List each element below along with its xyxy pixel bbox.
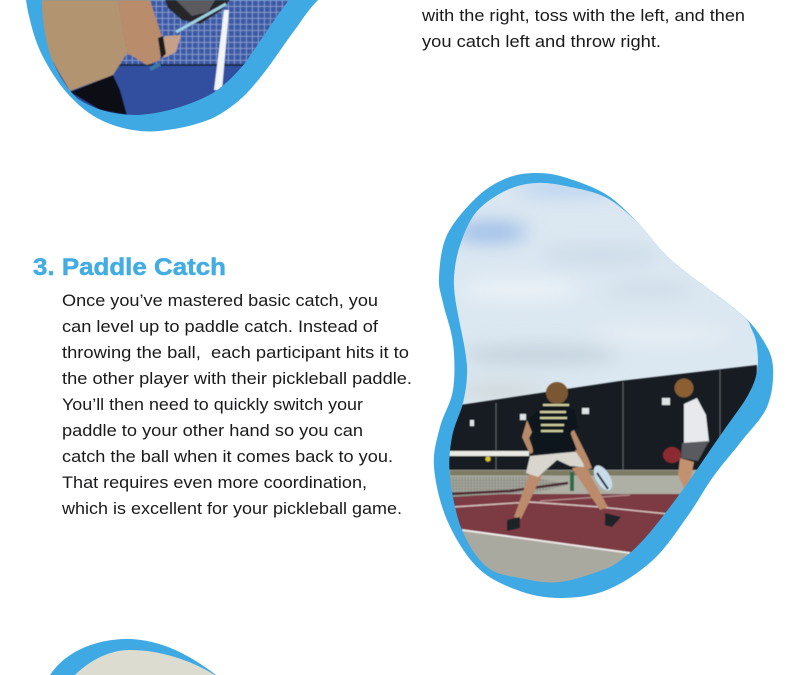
ball bbox=[485, 456, 491, 462]
near player's paddle bbox=[593, 464, 613, 492]
blue blob frame, top bbox=[26, 0, 318, 132]
blob photo: player at blue padel court bbox=[26, 0, 318, 132]
near concrete bbox=[462, 530, 631, 582]
blue blob frame, step 3 bbox=[434, 173, 773, 598]
body text, step 3: That requires even more coordination, bbox=[62, 473, 367, 492]
pale photo, bottom bbox=[75, 650, 215, 675]
body text, end of step 2 bbox=[421, 6, 745, 51]
red court bbox=[452, 494, 680, 553]
body text, step 3: can level up to paddle catch. Instead of bbox=[62, 317, 378, 336]
body text, step 3: throwing the ball, each participant hits it to bbox=[62, 343, 409, 362]
body text, step 3: catch the ball when it comes back to you. bbox=[62, 447, 393, 466]
court photo, step 3 bbox=[449, 182, 758, 582]
far ground and strip bbox=[449, 469, 697, 495]
arm bbox=[118, 0, 163, 65]
body text, step 3: the other player with their pickleball paddle. bbox=[62, 369, 412, 388]
court photo, top bbox=[42, 0, 289, 115]
body text, end of step 2: you catch left and throw right. bbox=[422, 32, 661, 51]
body text, step 3 bbox=[61, 291, 412, 518]
far player bbox=[678, 458, 694, 488]
body text, step 3: You’ll then need to quickly switch your bbox=[62, 395, 363, 414]
blob photo: two players on pickleball court bbox=[430, 170, 773, 598]
blue blob frame, bottom bbox=[50, 639, 216, 675]
blob photo: next step, cropped at page bottom bbox=[50, 639, 230, 675]
body text, step 3: which is excellent for your pickleball game. bbox=[61, 499, 402, 518]
shirt bbox=[42, 0, 128, 92]
shorts bbox=[70, 75, 127, 115]
paddle bbox=[165, 0, 230, 24]
net bbox=[449, 451, 529, 456]
body text, step 3: paddle to your other hand so you can bbox=[62, 421, 363, 440]
fence bbox=[440, 365, 757, 475]
near player bbox=[514, 472, 542, 519]
body text, end of step 2: with the right, toss with the left, and then bbox=[421, 6, 745, 25]
heading: 3. Paddle Catch: 3. Paddle Catch bbox=[33, 254, 226, 281]
body text, step 3: Once you’ve mastered basic catch, you bbox=[62, 291, 378, 310]
sky bbox=[454, 182, 758, 410]
